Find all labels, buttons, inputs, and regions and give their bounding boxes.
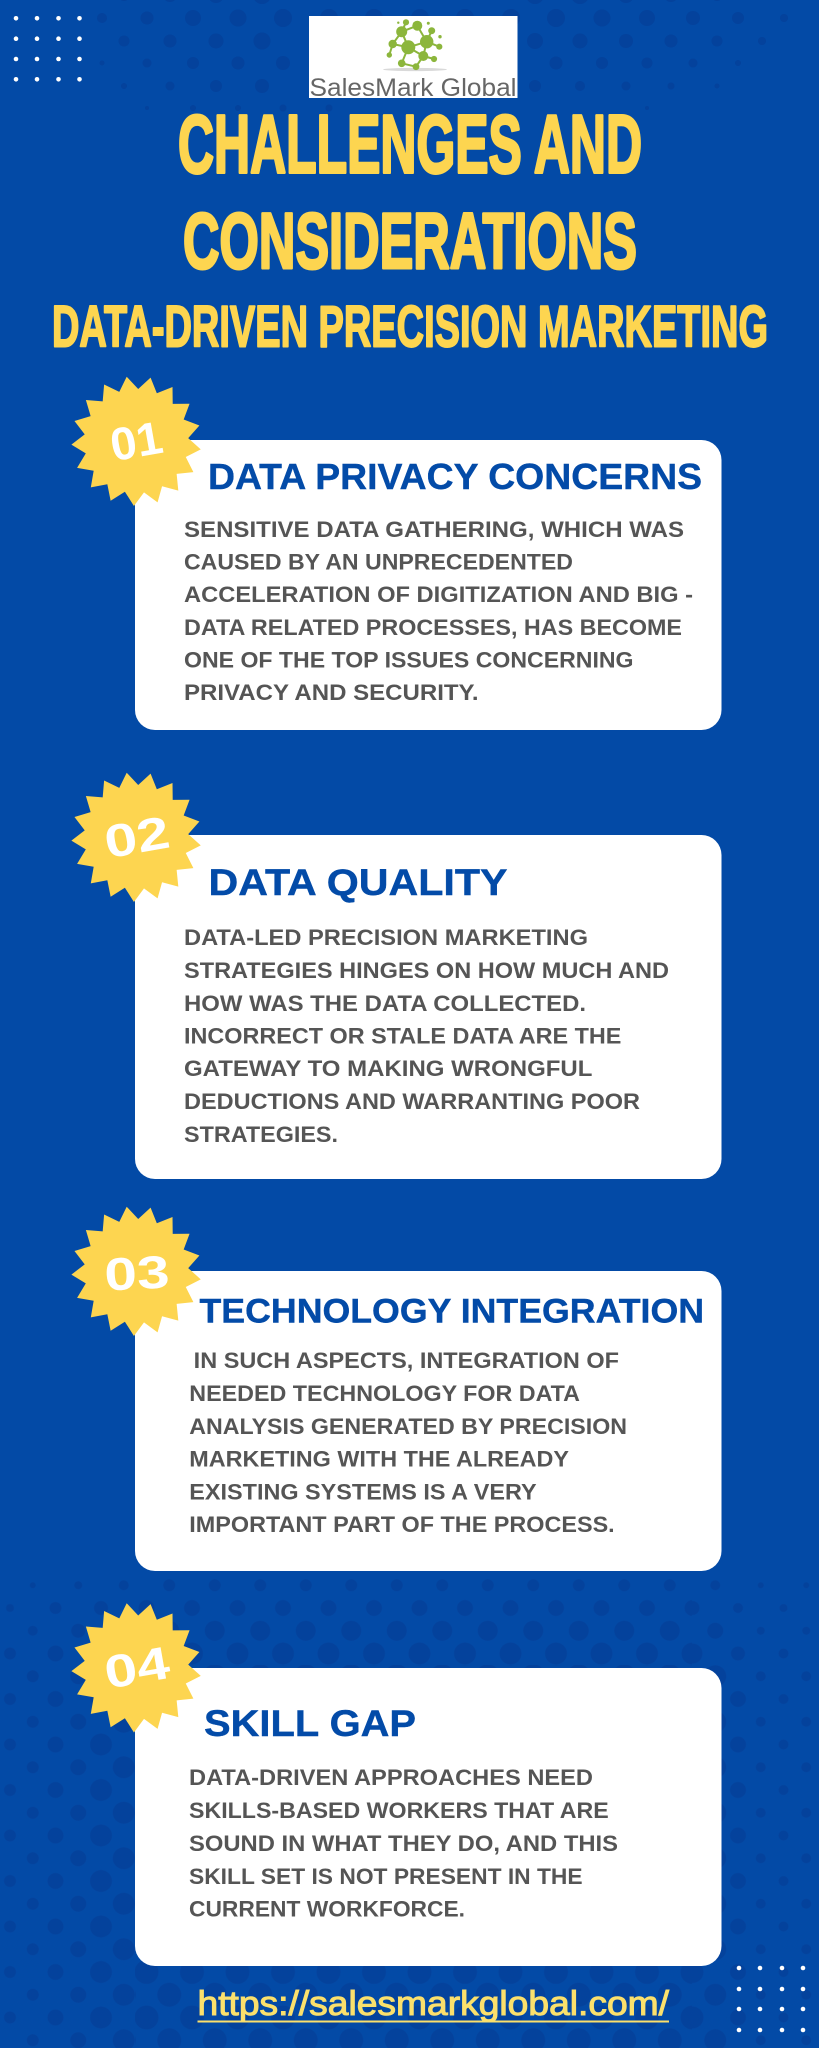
badge: 01 starburst (71, 377, 201, 506)
panel: data quality (71, 773, 721, 1179)
badge: 03 starburst (71, 1207, 201, 1336)
body text: EXISTING SYSTEMS IS A VERY (189, 1480, 537, 1505)
body text: ONE OF THE TOP ISSUES CONCERNING (184, 648, 634, 672)
body text: INCORRECT OR STALE DATA ARE THE (184, 1024, 621, 1048)
heading: SKILL GAP (204, 1703, 416, 1744)
icon: green network globe (383, 19, 447, 71)
body text: NEEDED TECHNOLOGY FOR DATA (189, 1381, 580, 1406)
body text: ANALYSIS GENERATED BY PRECISION (189, 1414, 627, 1439)
body text: STRATEGIES HINGES ON HOW MUCH AND (184, 958, 669, 983)
body text: SKILLS-BASED WORKERS THAT ARE (189, 1798, 609, 1823)
panel: technology integration (71, 1207, 721, 1571)
badge: 02 starburst (71, 773, 201, 902)
body text: CAUSED BY AN UNPRECEDENTED (184, 550, 573, 574)
decorative white dot grid: top left (14, 16, 82, 82)
body text: DATA-LED PRECISION MARKETING (184, 925, 588, 950)
body text: ACCELERATION OF DIGITIZATION AND BIG - (184, 582, 693, 607)
badge: 03 starburst: 03 (103, 1245, 171, 1301)
badge: 02 starburst: 02 (100, 806, 173, 868)
body text: DEDUCTIONS AND WARRANTING POOR (184, 1089, 640, 1114)
badge: 04 starburst (71, 1603, 201, 1732)
body text: PRIVACY AND SECURITY. (184, 680, 479, 705)
background: top halftone dots (97, 0, 788, 112)
body text: GATEWAY TO MAKING WRONGFUL (184, 1056, 593, 1081)
body text (189, 1765, 618, 1922)
heading: TECHNOLOGY INTEGRATION (200, 1292, 704, 1330)
panel: skill gap (71, 1603, 721, 1966)
body text (184, 517, 693, 705)
body text: MARKETING WITH THE ALREADY (189, 1447, 569, 1472)
body text: SOUND IN WHAT THEY DO, AND THIS (189, 1831, 618, 1856)
badge: 01 starburst: 01 (106, 411, 166, 471)
background: bottom halftone dots (0, 1574, 819, 2048)
body text: STRATEGIES. (184, 1122, 338, 1147)
logo: SalesMark Global (309, 16, 518, 102)
body text: IMPORTANT PART OF THE PROCESS. (189, 1512, 615, 1537)
body text: SKILL SET IS NOT PRESENT IN THE (189, 1864, 583, 1889)
decorative white dot grid: bottom right (737, 1966, 805, 2032)
badge: 04 starburst: 04 (100, 1636, 174, 1699)
website link: https://salesmarkglobal.com/ (198, 1985, 670, 2023)
panel: data privacy concerns (71, 377, 721, 730)
body text: DATA RELATED PROCESSES, HAS BECOME (184, 615, 682, 640)
heading: DATA QUALITY (208, 862, 508, 903)
body text (184, 925, 669, 1147)
heading: DATA PRIVACY CONCERNS (208, 456, 702, 497)
body text: HOW WAS THE DATA COLLECTED. (184, 991, 586, 1016)
body text (189, 1348, 627, 1537)
body text: SENSITIVE DATA GATHERING, WHICH WAS (184, 517, 684, 542)
body text: CURRENT WORKFORCE. (189, 1897, 465, 1922)
title (52, 98, 768, 360)
body text: DATA-DRIVEN APPROACHES NEED (189, 1765, 593, 1790)
body text: IN SUCH ASPECTS, INTEGRATION OF (194, 1348, 619, 1373)
logo wordmark: SalesMark Global (310, 74, 516, 102)
